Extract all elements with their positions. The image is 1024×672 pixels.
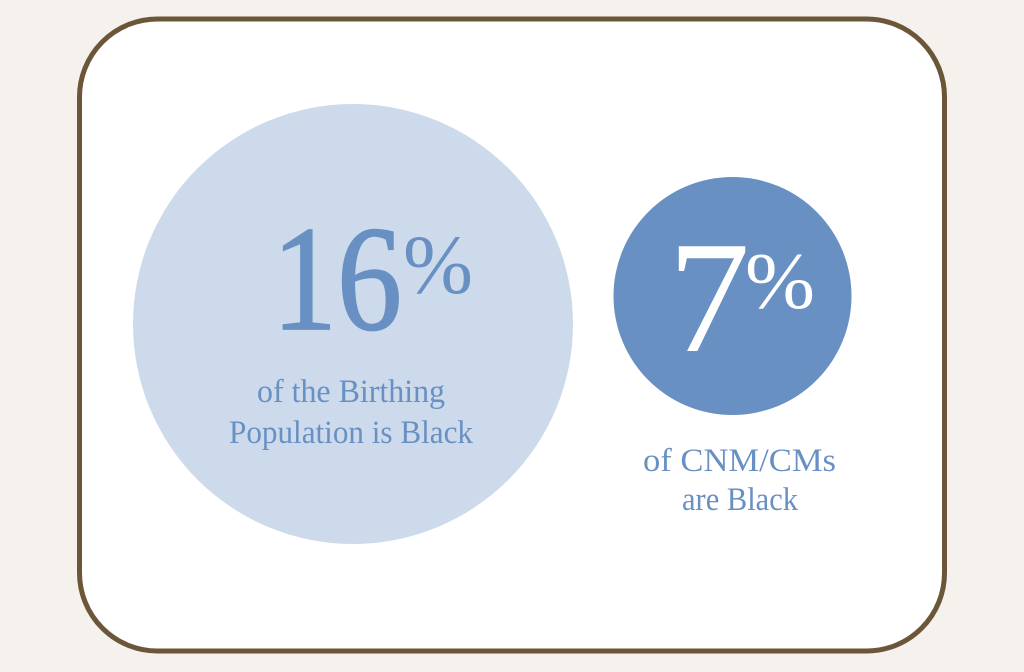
circle: birthing population (133, 104, 573, 544)
label: of CNM/CMs are Black (643, 443, 836, 518)
panel: rounded card (80, 19, 944, 651)
circle: CNM/CMs (614, 177, 852, 415)
label: of CNM/CMs are Black: of CNM/CMs (643, 443, 836, 479)
stat: 16 percent: 16 (272, 196, 402, 362)
label: of the Birthing Population is Black: of the Birthing (257, 374, 445, 410)
stat: 7 percent (668, 208, 815, 386)
label: of the Birthing Population is Black: Population is Black (229, 415, 473, 451)
stat: 7 percent: % (745, 238, 815, 326)
stat: 7 percent: 7 (668, 208, 750, 386)
stat: 16 percent: % (403, 219, 473, 312)
label: of CNM/CMs are Black: are Black (682, 482, 798, 518)
label: of the Birthing Population is Black (229, 374, 473, 451)
